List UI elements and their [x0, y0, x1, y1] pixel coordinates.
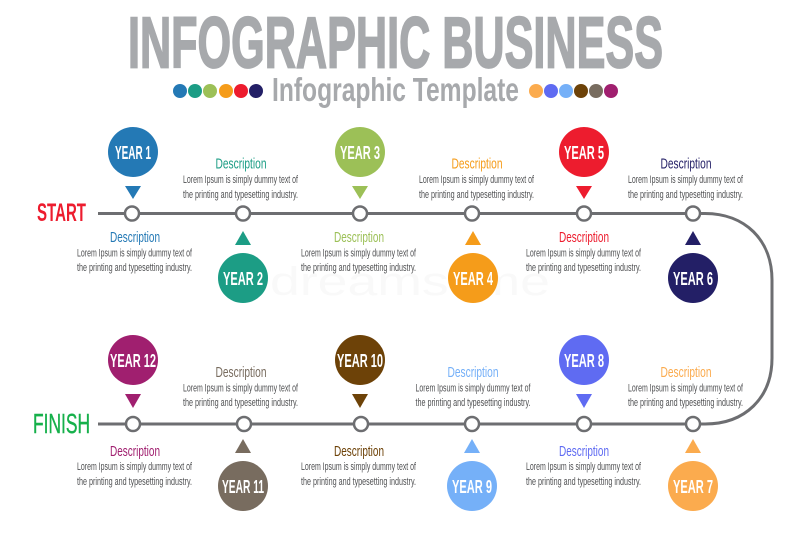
year 10 — [335, 335, 385, 431]
year 8 description — [526, 444, 642, 488]
colour dots left — [173, 84, 263, 98]
year 4 description — [419, 156, 535, 201]
year 9 — [447, 417, 497, 511]
year 12 description — [77, 444, 193, 488]
year 5 description — [526, 230, 642, 274]
year 6: YEAR 6 — [673, 268, 713, 289]
year 6 description: the printing and typesetting industry. — [628, 189, 743, 201]
year 1 description — [77, 230, 193, 274]
year 8 description: Description — [559, 444, 609, 460]
subtitle: Infographic Template — [272, 71, 519, 108]
year 9 description: Description — [448, 365, 498, 381]
year 10: YEAR 10 — [337, 350, 383, 371]
year 3 description: the printing and typesetting industry. — [301, 262, 416, 274]
year 9: YEAR 9 — [452, 476, 492, 497]
year 2 — [218, 206, 268, 303]
year 3 description — [301, 230, 417, 274]
year 4 description: Lorem Ipsum is simply dummy text of — [419, 174, 535, 186]
year 5 description: Lorem Ipsum is simply dummy text of — [526, 248, 642, 260]
year 2 description: the printing and typesetting industry. — [183, 189, 298, 201]
year 11 description: the printing and typesetting industry. — [183, 397, 298, 409]
year 10 description — [301, 444, 417, 488]
year 8 description: the printing and typesetting industry. — [526, 476, 641, 488]
year 5: YEAR 5 — [564, 142, 604, 163]
colour dots right — [529, 84, 618, 98]
year 3 description: Description — [334, 230, 384, 246]
year 5 description: Description — [559, 230, 609, 246]
year 7 description: the printing and typesetting industry. — [628, 397, 743, 409]
year 10 description: Lorem Ipsum is simply dummy text of — [301, 461, 417, 473]
year 8 — [559, 335, 609, 431]
year 8: YEAR 8 — [564, 350, 604, 371]
year 5 — [559, 127, 609, 220]
year 7: YEAR 7 — [673, 476, 713, 497]
year 1 description: Description — [110, 230, 160, 246]
year 11 description — [183, 365, 299, 409]
year 4: YEAR 4 — [453, 268, 493, 289]
year 11: YEAR 11 — [222, 476, 264, 497]
year 2 description: Lorem Ipsum is simply dummy text of — [183, 174, 299, 186]
year 1 — [108, 127, 158, 220]
year 4 description: the printing and typesetting industry. — [419, 189, 534, 201]
year 11 description: Description — [216, 365, 266, 381]
year 1: YEAR 1 — [115, 142, 151, 163]
year 2 description: Description — [216, 156, 266, 172]
year 8 description: Lorem Ipsum is simply dummy text of — [526, 461, 642, 473]
year 7 description: Description — [660, 365, 712, 381]
year 9 description: Lorem Ipsum is simply dummy text of — [416, 382, 531, 394]
year 2 description — [183, 156, 299, 201]
year 3: YEAR 3 — [340, 142, 380, 163]
year 1 description: the printing and typesetting industry. — [77, 262, 192, 274]
year 10 description: the printing and typesetting industry. — [301, 476, 416, 488]
year 11 description: Lorem Ipsum is simply dummy text of — [183, 382, 299, 394]
start label: START — [37, 199, 86, 227]
year 12 description: Description — [110, 444, 160, 460]
year 11 — [218, 417, 268, 511]
year 6 description: Description — [660, 156, 712, 172]
year 6 description — [628, 156, 744, 201]
finish label: FINISH — [33, 408, 90, 439]
year 4 — [448, 206, 498, 303]
watermark: dreamstime — [270, 260, 550, 304]
year 4 description: Description — [452, 156, 502, 172]
year 2: YEAR 2 — [223, 268, 263, 289]
year 7 — [668, 417, 718, 511]
year 9 description — [416, 365, 531, 409]
year 10 description: Description — [334, 444, 384, 460]
year 3 description: Lorem Ipsum is simply dummy text of — [301, 248, 417, 260]
year 12 description: Lorem Ipsum is simply dummy text of — [77, 461, 193, 473]
year 12 — [108, 335, 158, 431]
year 12: YEAR 12 — [110, 350, 156, 371]
year 7 description — [628, 365, 744, 409]
year 3 — [335, 127, 385, 220]
year 12 description: the printing and typesetting industry. — [77, 476, 192, 488]
year 5 description: the printing and typesetting industry. — [526, 262, 641, 274]
year 1 description: Lorem Ipsum is simply dummy text of — [77, 248, 193, 260]
year 6 — [668, 206, 718, 303]
year 9 description: the printing and typesetting industry. — [416, 397, 530, 409]
timeline path — [98, 214, 772, 424]
